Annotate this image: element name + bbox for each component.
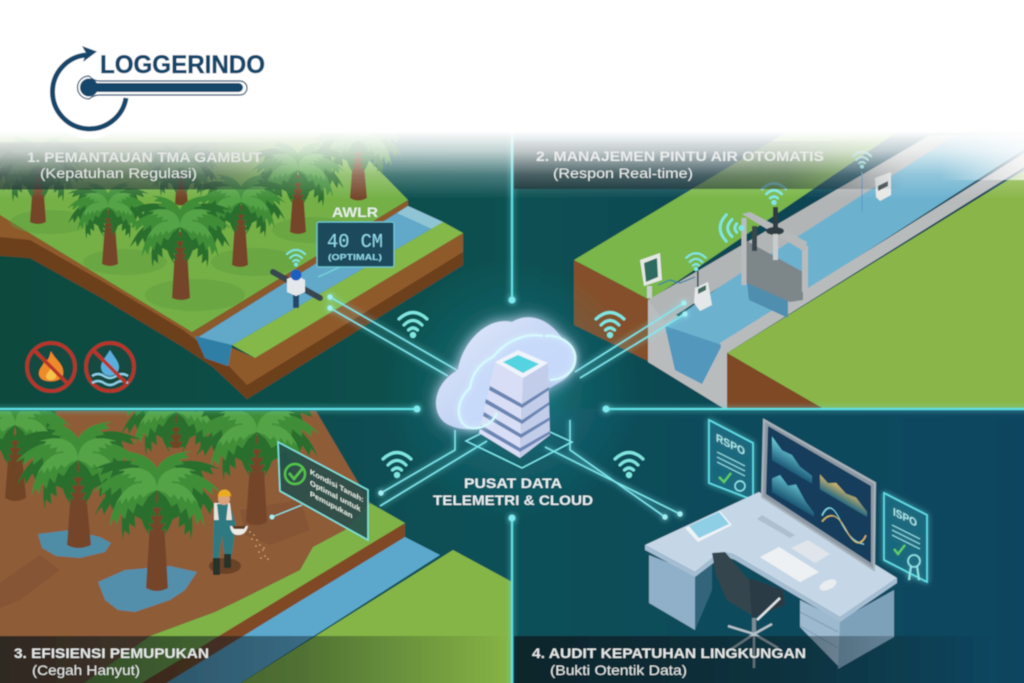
right concrete wall	[720, 147, 1024, 360]
canal inner bank	[192, 200, 408, 338]
water sensor unit	[694, 271, 712, 311]
large lower grass	[727, 164, 1024, 408]
heading 3: 3. EFISIENSI PEMUPUKAN	[14, 645, 209, 661]
soil ground	[0, 411, 370, 683]
logo thermometer	[78, 76, 247, 99]
fertiliser granules	[249, 531, 269, 560]
hub label: PUSAT DATA	[464, 475, 562, 491]
control panel display	[640, 253, 695, 298]
plantation soil side	[0, 209, 463, 399]
heading bar 1	[0, 142, 300, 190]
channel water	[665, 135, 1024, 384]
panel 2: automatic water gate	[574, 130, 1024, 408]
lower grass	[225, 550, 512, 683]
RSPO certificate: RSPO	[716, 432, 745, 458]
heading 4: (Bukti Otentik Data)	[550, 662, 687, 678]
left concrete wall	[648, 135, 955, 322]
desk left leg side	[695, 562, 712, 630]
canal water	[197, 206, 443, 366]
cloud back	[436, 317, 574, 429]
desk edge	[645, 545, 897, 622]
ISPO certificate	[884, 493, 927, 582]
canal bank grass	[232, 222, 463, 358]
AWLR sensor	[273, 250, 340, 308]
palm shadows on grass	[10, 210, 352, 311]
heading 1: 1. PEMANTAUAN TMA GAMBUT	[27, 149, 262, 165]
plantation palms	[0, 410, 320, 592]
panel 1: peat water level monitoring	[0, 105, 463, 399]
mouse	[818, 577, 838, 593]
logo	[53, 46, 265, 129]
palm trees row	[0, 105, 405, 300]
AWLR label: AWLR	[332, 204, 378, 220]
logo wordmark: LOGGERINDO	[100, 51, 265, 79]
icon: no fire	[27, 343, 75, 391]
keyboard	[760, 547, 819, 582]
gate wifi signals	[686, 152, 871, 270]
soil condition callout: Pemupukan	[310, 489, 353, 520]
heading 1	[27, 149, 262, 181]
desk top	[645, 492, 897, 617]
heading 2: (Respon Real-time)	[553, 165, 693, 181]
heading 1: (Kepatuhan Regulasi)	[40, 165, 197, 181]
circuit node dots	[327, 294, 688, 520]
heading 3: (Cegah Hanyut)	[32, 662, 140, 678]
heading 2	[536, 148, 824, 181]
ISPO certificate: ISPO	[893, 506, 917, 530]
panel 4: environmental compliance audit desk	[645, 420, 927, 669]
central glow	[382, 260, 642, 520]
connector end dots	[414, 297, 609, 521]
water puddle two	[98, 566, 197, 612]
upstream sensor unit	[862, 172, 891, 212]
AWLR readout	[317, 222, 394, 267]
front cloud fill	[459, 335, 575, 428]
AWLR readout: (OPTIMAL)	[328, 252, 382, 262]
heading 3	[0, 636, 512, 683]
notebook	[685, 511, 732, 542]
server stack	[479, 350, 550, 458]
wifi icons around hub	[383, 312, 643, 477]
water gate	[742, 207, 807, 318]
monitor stand	[791, 540, 830, 563]
desk right pedestal	[800, 590, 894, 669]
soil edge strip	[125, 523, 405, 683]
logo ring with arrow	[53, 46, 126, 129]
heading 4	[514, 636, 994, 683]
plantation grass	[0, 120, 408, 332]
top white fade	[0, 0, 1024, 199]
canal water strip	[150, 537, 440, 683]
desk left leg	[649, 555, 695, 630]
monitor dashboard charts	[772, 436, 867, 549]
darker soil patches	[0, 500, 310, 612]
soil left block	[574, 260, 650, 362]
cloud front outline	[459, 335, 575, 428]
office chair	[712, 552, 785, 668]
water puddle one	[38, 530, 111, 558]
soil condition callout: Kondisi Tanah:	[310, 467, 364, 504]
AWLR readout: 40 CM	[327, 231, 383, 253]
panel 3: fertilising efficiency	[0, 410, 512, 683]
upper grass	[574, 130, 900, 300]
grass strip	[70, 503, 405, 683]
heading bar 2	[514, 141, 904, 189]
hub label: TELEMETRI & CLOUD	[433, 492, 593, 508]
concrete channel front	[648, 300, 727, 408]
circuit lines to panels	[330, 297, 685, 517]
soil right block	[727, 353, 822, 408]
farmer	[209, 490, 248, 575]
monitor	[757, 420, 875, 570]
icon: no flood	[86, 343, 134, 391]
heading 4: 4. AUDIT KEPATUHAN LINGKUNGAN	[532, 645, 806, 661]
heading 2: 2. MANAJEMEN PINTU AIR OTOMATIS	[536, 148, 824, 164]
RSPO certificate	[709, 420, 753, 500]
soil condition callout: Optimal untuk	[310, 478, 361, 514]
soil condition callout	[270, 442, 368, 540]
hub base plate	[466, 416, 572, 468]
hub label	[433, 475, 593, 508]
hub: cloud and server	[436, 317, 575, 468]
